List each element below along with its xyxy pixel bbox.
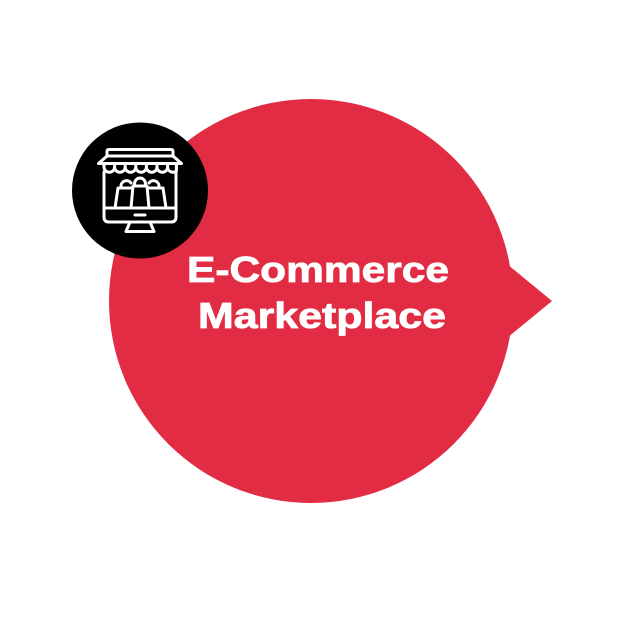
speech bubble: red circle with pointer: [109, 99, 552, 503]
icon part: monitor stand: [126, 222, 154, 232]
icon part: monitor frame: [104, 172, 176, 222]
title: [187, 249, 449, 336]
icon part: awning top: [98, 150, 182, 164]
icon part: awning scallops: [104, 164, 176, 172]
icon: online storefront with shopping bags: [98, 150, 182, 232]
title line 2: Marketplace: [198, 295, 446, 336]
icon badge: black circle: [72, 122, 208, 258]
icon part: monitor button: [135, 214, 145, 216]
icon part: left shopping bag: [115, 181, 131, 208]
icon part: right shopping bag: [149, 181, 166, 208]
title line 1: E-Commerce: [187, 249, 449, 290]
icon part: center shopping bag: [131, 178, 149, 208]
